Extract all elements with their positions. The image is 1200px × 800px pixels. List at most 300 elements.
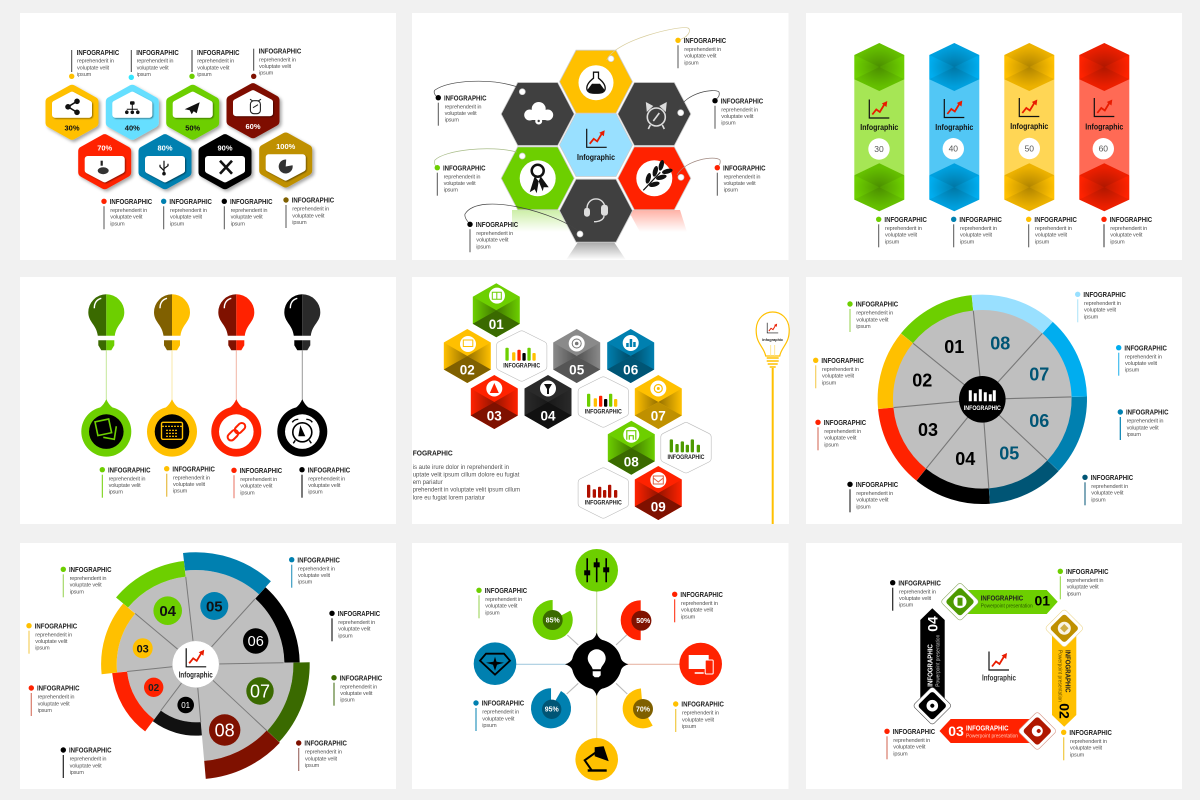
callout black bbox=[890, 578, 941, 611]
column red 60: 60 bbox=[1099, 144, 1108, 154]
column blue 40: Infographic bbox=[935, 122, 974, 132]
callout red: reprehenderit in bbox=[1110, 226, 1147, 232]
hexagon 08: 08 bbox=[624, 454, 639, 469]
segment numbers: 04 bbox=[955, 449, 975, 469]
callout bottom 1 bbox=[101, 197, 153, 229]
hexagon: cloud gear bbox=[501, 82, 574, 146]
callout 07 bbox=[1116, 343, 1167, 376]
hub with bulb icon bbox=[565, 633, 628, 696]
hexagon 50% paper plane bbox=[171, 90, 214, 135]
hexagon center: infographic: Infographic bbox=[577, 152, 615, 162]
callout 03: reprehenderit in bbox=[824, 429, 861, 435]
outlined hexagon chart 1: INFOGRAPHIC bbox=[503, 362, 540, 370]
callout headset bbox=[467, 220, 519, 252]
callout bottom 4: ipsum bbox=[292, 220, 307, 226]
column green 30: Infographic bbox=[860, 122, 899, 132]
callout red bbox=[884, 727, 936, 759]
callout yellow: INFOGRAPHIC bbox=[1069, 728, 1112, 737]
callout blue: voluptate velit bbox=[960, 233, 993, 239]
pie 50% bbox=[631, 610, 651, 631]
callout bottom 3: INFOGRAPHIC bbox=[230, 197, 273, 206]
callout bottom 2: ipsum bbox=[170, 221, 185, 227]
column yellow 50 bbox=[1004, 43, 1054, 211]
arrow 01 green: 01 bbox=[1035, 593, 1050, 609]
callout 95: ipsum bbox=[482, 723, 497, 729]
text block: clipped heading and paragraph: em pariatur bbox=[413, 479, 443, 486]
callout green bbox=[100, 465, 151, 498]
callout 07: INFOGRAPHIC bbox=[1124, 343, 1167, 352]
callout green bbox=[61, 565, 112, 597]
hexagon 90% tools bbox=[204, 139, 246, 184]
callout red: INFOGRAPHIC bbox=[893, 727, 936, 736]
callout black: ipsum bbox=[70, 770, 84, 776]
callout wheat bbox=[715, 163, 766, 196]
bulb red with link icon bbox=[211, 294, 261, 457]
column green 30: 30 bbox=[874, 144, 884, 154]
callout 06: ipsum bbox=[1127, 432, 1141, 438]
node bottom: lamp bbox=[575, 738, 618, 781]
callout top 4: ipsum bbox=[259, 71, 274, 77]
hexagon 100% pie: 100% bbox=[276, 142, 296, 151]
callout yellow: voluptate velit bbox=[173, 482, 206, 488]
callout bottom 2: reprehenderit in bbox=[170, 208, 207, 214]
callout green bbox=[876, 215, 927, 247]
hexagon 03 bbox=[471, 375, 518, 429]
callout black: ipsum bbox=[308, 490, 323, 496]
hexagon 06 bbox=[607, 329, 654, 383]
callout yellow: INFOGRAPHIC bbox=[172, 464, 215, 473]
callout headset: voluptate velit bbox=[476, 238, 509, 244]
bulb yellow with calendar icon bbox=[147, 294, 197, 457]
arrow 01 green bbox=[968, 590, 1058, 614]
callout blue bbox=[289, 555, 340, 588]
center chart label: Infographic bbox=[982, 674, 1016, 682]
callout red: reprehenderit in bbox=[240, 477, 277, 483]
outlined hexagon chart 3 bbox=[665, 427, 707, 469]
numbered circles: 06 bbox=[248, 634, 264, 650]
outlined hexagon chart 4 bbox=[582, 472, 624, 514]
callout 04: INFOGRAPHIC bbox=[856, 480, 899, 489]
callout wheat: voluptate velit bbox=[724, 181, 756, 187]
outlined hexagon chart 4: INFOGRAPHIC bbox=[585, 500, 622, 506]
diamond 02 bbox=[1045, 609, 1084, 648]
callout black: reprehenderit in bbox=[899, 589, 936, 595]
callout dark green: ipsum bbox=[340, 698, 355, 704]
numbered circles: 04 bbox=[159, 603, 177, 620]
callout top 4 bbox=[251, 47, 302, 79]
callout 02: INFOGRAPHIC bbox=[821, 356, 864, 365]
callout cloud bbox=[436, 93, 487, 126]
callout cloud: reprehenderit in bbox=[445, 104, 481, 110]
callout yellow: ipsum bbox=[1070, 752, 1085, 758]
connector lines and anchor dots bbox=[434, 28, 720, 237]
pie 95%: 95% bbox=[545, 707, 559, 714]
callout dark red: voluptate velit bbox=[305, 756, 338, 762]
callout green: voluptate velit bbox=[885, 233, 918, 239]
callout yellow bbox=[1061, 728, 1112, 760]
callout red: reprehenderit in bbox=[893, 738, 930, 744]
column red 60: Infographic bbox=[1085, 122, 1124, 132]
callout dark green: INFOGRAPHIC bbox=[340, 673, 383, 682]
callout 08: ipsum bbox=[1084, 314, 1099, 320]
callout top 4: voluptate velit bbox=[259, 64, 292, 70]
callout green: reprehenderit in bbox=[885, 226, 922, 232]
callout blue: reprehenderit in bbox=[298, 566, 335, 572]
callout yellow: voluptate velit bbox=[35, 639, 68, 645]
text block: clipped heading and paragraph: prehenderit in voluptate velit ipsum cillum bbox=[413, 487, 520, 494]
callout yellow: reprehenderit in bbox=[1070, 739, 1107, 745]
callout 50: reprehenderit in bbox=[681, 601, 718, 607]
callout 03: voluptate velit bbox=[824, 436, 857, 442]
callout black: ipsum bbox=[899, 603, 914, 609]
callout yellow bbox=[1026, 215, 1077, 247]
hexagon: wheat bbox=[618, 147, 691, 210]
callout 50: ipsum bbox=[681, 614, 696, 620]
hexagon 01: 01 bbox=[489, 317, 504, 332]
callout 85: reprehenderit in bbox=[485, 597, 522, 603]
hexagon top: flask bbox=[560, 50, 632, 113]
callout bottom 4: reprehenderit in bbox=[292, 207, 329, 213]
callout blue bbox=[951, 215, 1002, 247]
hexagon 04 bbox=[524, 375, 572, 429]
segment numbers: 08 bbox=[990, 334, 1010, 354]
callout green: ipsum bbox=[885, 239, 900, 245]
callout headset: ipsum bbox=[476, 244, 491, 250]
callout 07: voluptate velit bbox=[1125, 361, 1158, 367]
callout 70: reprehenderit in bbox=[682, 711, 719, 717]
hexagon 02: 02 bbox=[460, 363, 475, 378]
callout yellow: reprehenderit in bbox=[35, 632, 72, 638]
callout 95 bbox=[473, 699, 525, 731]
callout flask: voluptate velit bbox=[684, 54, 717, 60]
bulb green with photos icon bbox=[81, 294, 131, 457]
callout dark red: INFOGRAPHIC bbox=[304, 739, 347, 748]
callout green: reprehenderit in bbox=[109, 476, 145, 482]
callout 04: voluptate velit bbox=[856, 498, 889, 504]
outlined hexagon chart 2 bbox=[582, 381, 624, 423]
callout 07: reprehenderit in bbox=[1125, 354, 1162, 360]
callout 06: voluptate velit bbox=[1127, 425, 1159, 431]
column blue 40: 40 bbox=[949, 144, 958, 154]
numbered circles: 03 bbox=[137, 643, 149, 655]
hexagon 07 bbox=[635, 375, 682, 429]
arrow 03 red: 03 bbox=[948, 723, 964, 739]
wheel chart bbox=[845, 262, 1119, 536]
bulb black with clock icon bbox=[277, 294, 327, 457]
callout black right: INFOGRAPHIC bbox=[338, 609, 381, 618]
node left: diamond bbox=[474, 642, 516, 685]
pie 70% bbox=[629, 695, 656, 722]
callout green: ipsum bbox=[109, 490, 123, 496]
callout top 1: voluptate velit bbox=[77, 65, 110, 71]
callout red: ipsum bbox=[38, 708, 52, 714]
callout ribbon: reprehenderit in bbox=[444, 174, 480, 180]
callout clock: voluptate velit bbox=[721, 114, 754, 120]
callout ribbon: ipsum bbox=[444, 188, 458, 194]
spokes bbox=[515, 590, 681, 740]
callout black bbox=[299, 465, 351, 498]
arrow 02 yellow: Powerpoint presentation bbox=[1056, 650, 1062, 702]
callout 07: ipsum bbox=[1125, 368, 1140, 374]
callout dark red bbox=[296, 739, 347, 771]
callout ribbon: voluptate velit bbox=[444, 181, 476, 187]
hexagon 09: 09 bbox=[651, 500, 666, 515]
numbered circles: 01 bbox=[181, 701, 191, 710]
wheel chart: INFOGRAPHIC bbox=[964, 405, 1001, 412]
callout 04: reprehenderit in bbox=[856, 491, 893, 497]
node top: sliders bbox=[575, 549, 618, 592]
callout yellow: voluptate velit bbox=[1035, 233, 1068, 239]
callout 02 bbox=[813, 356, 864, 388]
callout 03: INFOGRAPHIC bbox=[824, 418, 867, 427]
callout 50: INFOGRAPHIC bbox=[680, 590, 723, 599]
hexagon: headset bbox=[560, 179, 632, 242]
callout red: ipsum bbox=[893, 751, 908, 757]
callout top 2: voluptate velit bbox=[137, 65, 169, 71]
hexagon 60% clock: 60% bbox=[245, 122, 261, 131]
segment numbers: 06 bbox=[1029, 411, 1049, 431]
callout bottom 1: reprehenderit in bbox=[110, 208, 147, 214]
callout 02: reprehenderit in bbox=[822, 367, 859, 373]
arrow 04 black: Powerpoint presentation bbox=[935, 635, 941, 687]
callout 02: voluptate velit bbox=[822, 374, 855, 380]
callout bottom 1: INFOGRAPHIC bbox=[110, 197, 153, 206]
callout ribbon: INFOGRAPHIC bbox=[443, 163, 486, 172]
callout 95: voluptate velit bbox=[482, 716, 515, 722]
arrow 01 green: INFOGRAPHIC bbox=[981, 593, 1024, 602]
arrow 02 yellow: INFOGRAPHIC bbox=[1064, 650, 1073, 693]
callout green: voluptate velit bbox=[70, 583, 102, 589]
hexagon 07: 07 bbox=[651, 409, 666, 424]
exploded wedges bbox=[46, 514, 346, 800]
callout green: voluptate velit bbox=[109, 483, 141, 489]
callout red: reprehenderit in bbox=[38, 695, 74, 701]
column blue 40 bbox=[929, 43, 979, 211]
text block: clipped heading and paragraph: is aute irure dolor in reprehenderit in bbox=[413, 464, 510, 471]
callout cloud: voluptate velit bbox=[445, 111, 477, 117]
callout cloud: INFOGRAPHIC bbox=[444, 93, 487, 102]
arrow 03 red: INFOGRAPHIC bbox=[966, 723, 1009, 732]
callout red: voluptate velit bbox=[38, 701, 70, 707]
arrow 04 black bbox=[920, 608, 945, 710]
callout bottom 2 bbox=[161, 197, 212, 229]
callout top 1: ipsum bbox=[77, 72, 92, 78]
callout blue: reprehenderit in bbox=[960, 226, 997, 232]
outline bulb with stem: Infographic bbox=[762, 338, 783, 342]
callout 06 bbox=[1118, 408, 1169, 440]
text block: clipped heading and paragraph: uptate velit ipsum cillum dolore eu fugiat bbox=[413, 472, 520, 478]
hexagon 70% flask: 70% bbox=[97, 144, 113, 153]
callout 85 bbox=[476, 586, 528, 618]
diamond 04 bbox=[913, 686, 952, 725]
callout 05: ipsum bbox=[1091, 497, 1106, 503]
diamond 03 bbox=[1018, 711, 1057, 751]
callout clock: reprehenderit in bbox=[721, 107, 758, 113]
panel: arrow cycle bbox=[806, 543, 1182, 789]
panel: hexagon columns bbox=[806, 13, 1182, 260]
callout black: reprehenderit in bbox=[70, 757, 106, 763]
callout flask: INFOGRAPHIC bbox=[684, 36, 727, 45]
diamond 01 bbox=[940, 582, 980, 621]
callout black right: reprehenderit in bbox=[338, 620, 375, 626]
callout green: INFOGRAPHIC bbox=[884, 215, 927, 224]
column yellow 50: 50 bbox=[1025, 144, 1034, 154]
callout yellow bbox=[26, 621, 78, 654]
callout 50: voluptate velit bbox=[681, 608, 714, 614]
pie 50%: 50% bbox=[636, 618, 651, 625]
callout wheat: reprehenderit in bbox=[724, 174, 760, 180]
arrow 03 red: Powerpoint presentation bbox=[966, 734, 1018, 740]
callout top 4: reprehenderit in bbox=[259, 57, 296, 63]
panel: honeycomb bbox=[412, 13, 788, 260]
callout headset: INFOGRAPHIC bbox=[476, 220, 519, 229]
callout bottom 3 bbox=[222, 197, 273, 229]
callout blue: ipsum bbox=[960, 239, 975, 245]
hexagon 09 bbox=[635, 466, 682, 520]
exploded wedges: Infographic bbox=[179, 670, 213, 679]
callout bottom 3: ipsum bbox=[231, 221, 245, 227]
arrow 02 yellow: 02 bbox=[1056, 703, 1072, 719]
callout black: INFOGRAPHIC bbox=[308, 465, 351, 474]
hexagon 40% hierarchy: 40% bbox=[125, 124, 140, 133]
callout yellow: INFOGRAPHIC bbox=[1034, 215, 1077, 224]
callout 70 bbox=[673, 700, 724, 732]
pie 85% bbox=[539, 606, 566, 634]
column yellow 50: Infographic bbox=[1010, 121, 1049, 131]
callout top 3 bbox=[189, 48, 240, 79]
callout red: ipsum bbox=[1110, 239, 1125, 245]
callout bottom 4 bbox=[283, 196, 335, 228]
callout top 3: ipsum bbox=[197, 72, 212, 78]
callout top 4: INFOGRAPHIC bbox=[259, 47, 302, 56]
callout blue: ipsum bbox=[298, 580, 313, 586]
column green 30 bbox=[854, 43, 904, 211]
panel: light bulbs bbox=[20, 277, 396, 524]
callout top 1: INFOGRAPHIC bbox=[77, 48, 120, 57]
callout clock: ipsum bbox=[721, 121, 736, 127]
callout flask: reprehenderit in bbox=[684, 47, 721, 53]
numbered circles: 08 bbox=[215, 720, 235, 740]
callout red: voluptate velit bbox=[240, 484, 273, 490]
numbered circles: 07 bbox=[250, 682, 270, 702]
callout top 2: reprehenderit in bbox=[137, 59, 173, 65]
callout 04: ipsum bbox=[856, 504, 871, 510]
callout dark green: reprehenderit in bbox=[340, 684, 377, 690]
hexagon 40% hierarchy bbox=[111, 90, 154, 135]
callout black: voluptate velit bbox=[70, 763, 102, 769]
callout 70: ipsum bbox=[682, 724, 697, 730]
callout bottom 2: voluptate velit bbox=[170, 215, 203, 221]
callout 08: INFOGRAPHIC bbox=[1083, 290, 1126, 299]
hexagon 06: 06 bbox=[623, 363, 639, 378]
callout red bbox=[231, 466, 283, 498]
callout bottom 2: INFOGRAPHIC bbox=[169, 197, 212, 206]
callout green: reprehenderit in bbox=[70, 576, 106, 582]
callout black: reprehenderit in bbox=[308, 476, 345, 482]
hexagon 08 bbox=[608, 421, 655, 475]
pie 70%: 70% bbox=[636, 706, 651, 713]
callout dark red: reprehenderit in bbox=[305, 750, 342, 756]
numbered circles: 02 bbox=[148, 683, 160, 694]
callout dark red: ipsum bbox=[305, 763, 320, 769]
callout 05: reprehenderit in bbox=[1091, 484, 1128, 490]
outline bulb with stem bbox=[756, 312, 789, 524]
callout 02: ipsum bbox=[822, 380, 837, 386]
callout clock: INFOGRAPHIC bbox=[721, 96, 764, 105]
callout red: INFOGRAPHIC bbox=[240, 466, 283, 475]
callout yellow: reprehenderit in bbox=[1035, 226, 1072, 232]
hexagon 60% clock bbox=[232, 88, 274, 133]
outlined hexagon chart 1 bbox=[501, 335, 543, 377]
callout bottom 4: INFOGRAPHIC bbox=[292, 196, 335, 205]
callout top 3: INFOGRAPHIC bbox=[197, 48, 240, 57]
segment numbers bbox=[912, 334, 1049, 469]
hexagon 80% usb bbox=[144, 139, 186, 184]
hexagon 70% flask bbox=[83, 139, 126, 184]
text block: clipped heading and paragraph: FOGRAPHIC bbox=[413, 448, 453, 458]
callout yellow: INFOGRAPHIC bbox=[35, 621, 78, 630]
callout dark green bbox=[331, 673, 383, 706]
pie 85%: 85% bbox=[546, 617, 560, 624]
callout headset: reprehenderit in bbox=[476, 231, 513, 237]
segment numbers: 03 bbox=[918, 420, 938, 440]
text block: clipped heading and paragraph bbox=[413, 448, 520, 502]
callout green: voluptate velit bbox=[1067, 585, 1099, 591]
callout flask bbox=[675, 36, 727, 68]
callout 03: ipsum bbox=[824, 442, 839, 448]
callout black right bbox=[329, 609, 381, 641]
hexagon 01 bbox=[473, 283, 520, 337]
callout green bbox=[1058, 567, 1109, 599]
callout red bbox=[29, 684, 80, 716]
callout top 1 bbox=[69, 48, 120, 79]
callout bottom 1: ipsum bbox=[110, 221, 125, 227]
arrow 04 black: INFOGRAPHIC bbox=[926, 644, 935, 687]
segment numbers: 01 bbox=[944, 337, 964, 357]
panel: segmented wheel bbox=[806, 262, 1182, 536]
callout red: voluptate velit bbox=[893, 745, 926, 751]
outlined hexagon chart 3: INFOGRAPHIC bbox=[668, 454, 705, 461]
hexagon 30% share: 30% bbox=[64, 124, 80, 133]
arrow 02 yellow bbox=[1052, 636, 1076, 727]
panel: radial hub bbox=[412, 543, 788, 789]
callout yellow: ipsum bbox=[35, 646, 50, 652]
arrow 04 black: 04 bbox=[924, 616, 940, 632]
callout top 1: reprehenderit in bbox=[77, 59, 114, 65]
callout yellow bbox=[164, 464, 215, 497]
hexagon 80% usb: 80% bbox=[157, 144, 173, 153]
callout black: INFOGRAPHIC bbox=[69, 746, 112, 755]
callout green: reprehenderit in bbox=[1067, 578, 1103, 584]
callout green: ipsum bbox=[1067, 591, 1081, 597]
hexagon 30% share bbox=[50, 90, 94, 135]
reflections under hexagons bbox=[512, 210, 687, 260]
panel: percent hexagons bbox=[20, 13, 396, 260]
segment numbers: 07 bbox=[1029, 365, 1049, 385]
callout clock bbox=[712, 96, 764, 129]
callout 04 bbox=[847, 480, 899, 512]
callout 95: reprehenderit in bbox=[482, 710, 519, 716]
callout 05: INFOGRAPHIC bbox=[1091, 473, 1134, 482]
callout blue: voluptate velit bbox=[298, 573, 331, 579]
callout black: voluptate velit bbox=[899, 596, 932, 602]
callout 70: INFOGRAPHIC bbox=[681, 700, 724, 709]
node right: devices bbox=[679, 643, 722, 685]
callout green: INFOGRAPHIC bbox=[108, 465, 151, 474]
center chart label bbox=[982, 652, 1016, 682]
hexagon 50% paper plane: 50% bbox=[185, 124, 201, 133]
panel: exploded wheel bbox=[20, 514, 396, 800]
